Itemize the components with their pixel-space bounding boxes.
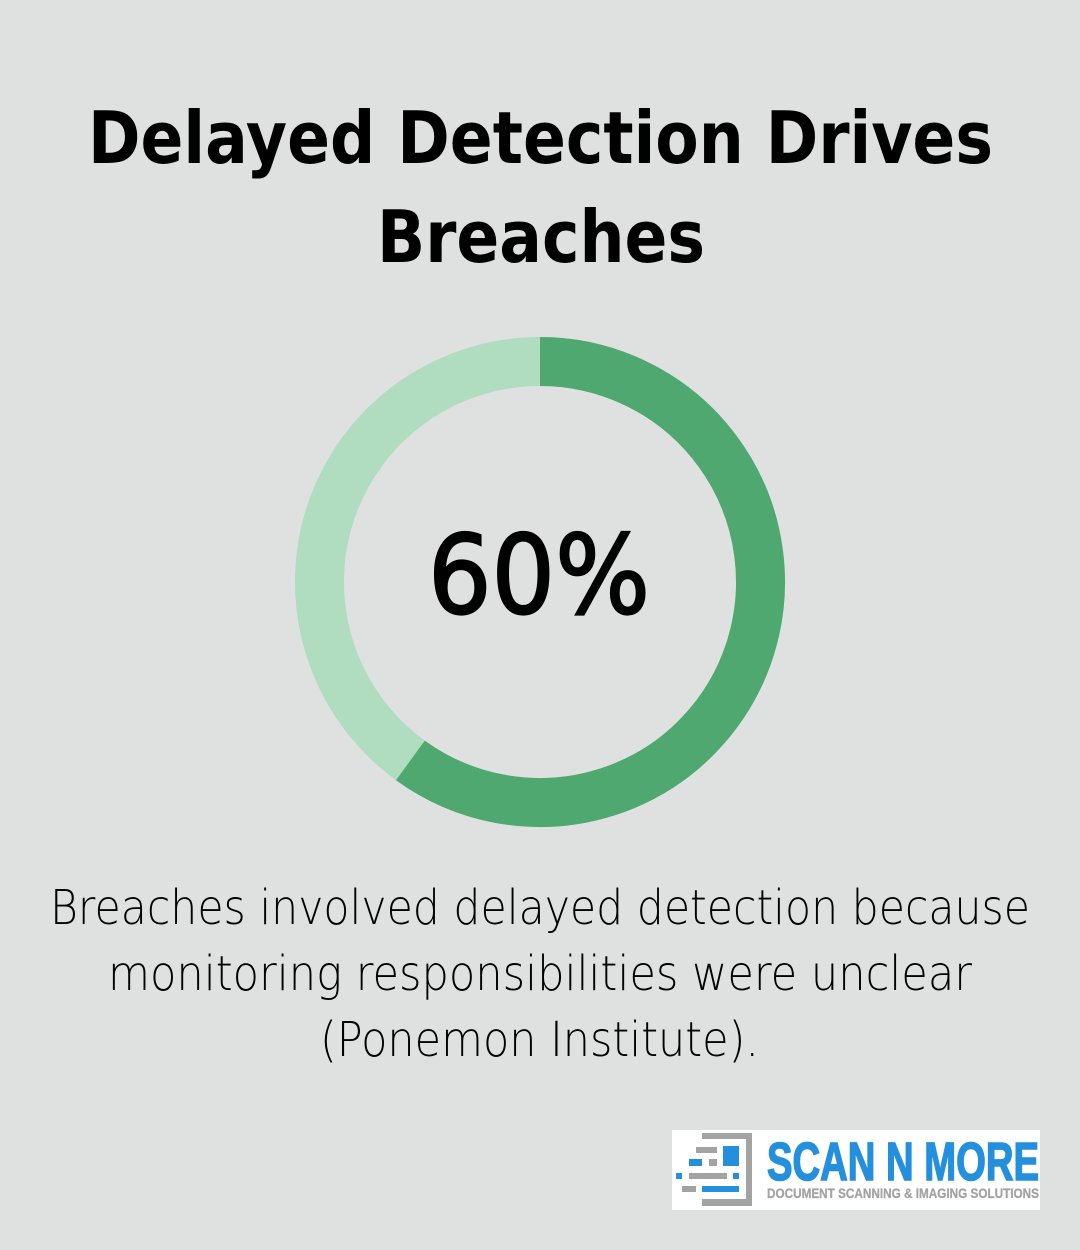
description text bbox=[50, 880, 1030, 1068]
title bbox=[88, 96, 993, 279]
donut 60% segment bbox=[410, 362, 760, 802]
donut value: 60% bbox=[428, 512, 650, 639]
donut remainder segment bbox=[320, 362, 760, 802]
logo icon bbox=[676, 1133, 752, 1206]
logo: Scan N More bbox=[672, 1130, 1040, 1210]
donut chart: 60% bbox=[320, 362, 760, 802]
description text: (Ponemon Institute). bbox=[320, 1012, 759, 1068]
description text: monitoring responsibilities were unclear bbox=[108, 946, 972, 1002]
title: Breaches bbox=[377, 195, 705, 279]
